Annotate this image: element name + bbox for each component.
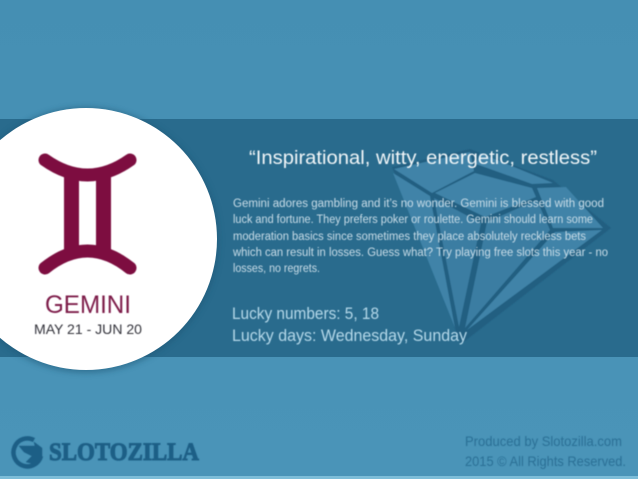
icon: dragon emblem xyxy=(13,438,42,466)
description text block: moderation basics since sometimes they place absolutely reckless bets xyxy=(233,231,586,243)
description text block: losses, no regrets. xyxy=(233,263,320,275)
description text block: which can result in losses. Guess what? Try playing free slots this year - no xyxy=(232,247,608,259)
footer credits: Produced by Slotozilla.com xyxy=(465,433,622,449)
description text block xyxy=(232,198,608,275)
description text block: luck and fortune. They prefers poker or roulette. Gemini should learn some xyxy=(233,214,593,226)
logo: slotozilla xyxy=(13,438,199,466)
footer credits xyxy=(465,433,626,469)
lucky numbers and days xyxy=(232,304,467,345)
logo wordmark: SLOTOZILLA xyxy=(49,439,199,466)
sign name: GEMINI xyxy=(45,291,131,319)
quote heading: “Inspirational, witty, energetic, restless” xyxy=(249,147,597,169)
footer credits: 2015 © All Rights Reserved. xyxy=(465,453,626,469)
panel: sign circle xyxy=(0,107,219,373)
icon: diamond watermark xyxy=(392,149,611,344)
description text block: Gemini adores gambling and it’s no wonder. Gemini is blessed with good xyxy=(233,198,604,210)
icon: gemini symbol xyxy=(45,160,130,268)
dark band panel xyxy=(0,119,638,357)
sign dates: MAY 21 - JUN 20 xyxy=(34,321,142,337)
lucky numbers and days: Lucky days: Wednesday, Sunday xyxy=(232,326,467,345)
lucky numbers and days: Lucky numbers: 5, 18 xyxy=(232,304,379,323)
